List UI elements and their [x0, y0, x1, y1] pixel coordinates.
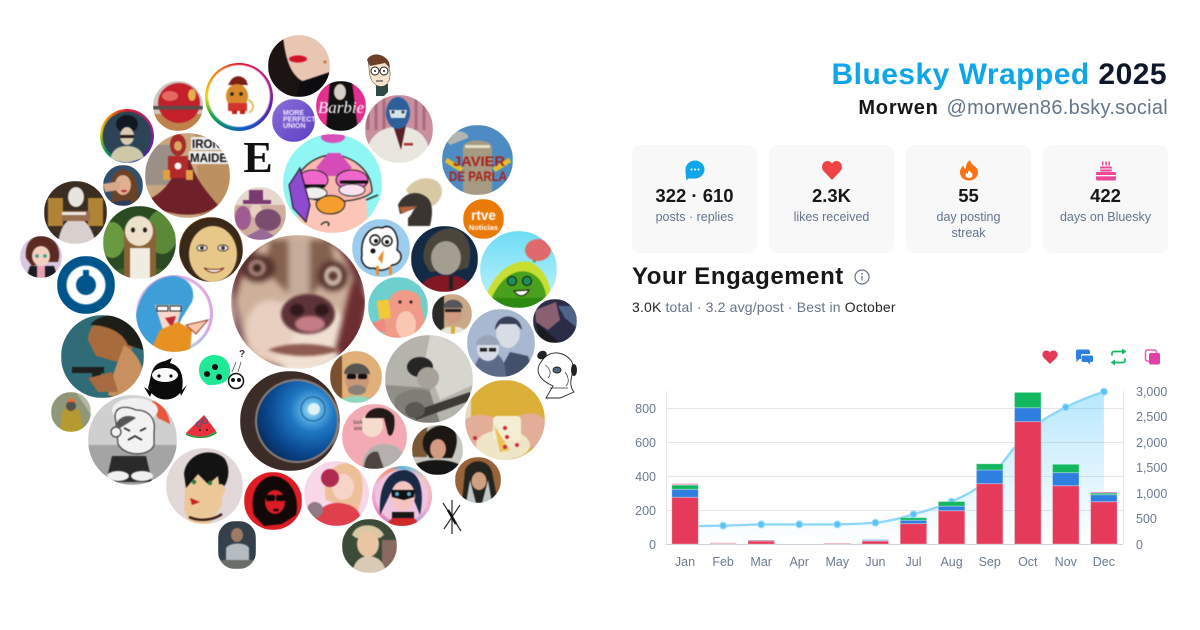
icon: birthday cake [1093, 158, 1119, 182]
avatar: curly anime girl [20, 236, 62, 278]
avatar: purple hat portrait [234, 187, 286, 240]
avatar: red lips portrait [268, 35, 330, 97]
month labels: Sep [979, 555, 1001, 569]
month labels: Jun [865, 555, 886, 569]
avatar: couple sketch [467, 309, 535, 377]
caption: streak [951, 226, 986, 240]
avatar: rtve Noticias: Noticias [469, 223, 498, 232]
avatar: woman with pistol painting [61, 315, 144, 398]
right axis labels: 3,000 [1136, 385, 1167, 399]
icon: heart [819, 158, 845, 182]
right axis labels: 0 [1136, 538, 1143, 552]
stacked bars [672, 392, 1117, 544]
avatar: rainbow ring portrait [100, 109, 154, 163]
avatar: dark purple collage [533, 299, 577, 343]
avatar: green mound character [480, 231, 557, 308]
left axis labels: 0 [649, 538, 656, 552]
avatar: masked heroine with pastel ring [372, 466, 432, 526]
avatar: hooded man [455, 457, 501, 503]
avatar: E logo: E [243, 133, 273, 182]
avatar: blue ring logo [57, 256, 115, 314]
avatar: pink sci-fi woman [304, 461, 369, 526]
left axis labels: 200 [635, 504, 656, 518]
left axis labels [635, 402, 656, 552]
avatar: otter with phone [368, 277, 428, 338]
right axis labels: 500 [1136, 512, 1157, 526]
cumulative area [685, 392, 1104, 544]
caption: posts · replies [656, 210, 733, 224]
avatar: pink background sketch girl [342, 404, 407, 469]
avatar: More Perfect Union logo: UNION [283, 123, 306, 130]
title: Bluesky Wrapped 2025 [832, 58, 1167, 91]
stat card: days on Bluesky [1043, 145, 1168, 253]
avatar: dark-haired woman [412, 425, 463, 475]
avatar: red apple [153, 81, 203, 131]
avatar: Iron Maiden costume: IRON [192, 139, 221, 151]
avatar: More Perfect Union logo: PERFECT [283, 116, 315, 124]
value: 55 [958, 185, 979, 206]
avatar: watermelon [184, 413, 218, 438]
month labels: Jan [675, 555, 695, 569]
avatar: man in sunglasses [330, 351, 382, 403]
avatar: green skull with bug [199, 348, 245, 389]
avatar: red woman silhouette [244, 472, 302, 530]
avatar: woman selfie [103, 165, 143, 206]
month labels [675, 555, 1115, 569]
month labels: Dec [1093, 555, 1115, 569]
avatar: grumpy santa sketch [88, 395, 177, 485]
cumulative line with points [685, 388, 1107, 529]
avatar: rtve Noticias: rtve [471, 208, 496, 223]
avatar: ninja [143, 358, 188, 402]
caption: days on Bluesky [1060, 210, 1151, 224]
stat card: day posting streak [906, 145, 1031, 253]
user name and handle: Morwen @morwen86.bsky.social [858, 97, 1168, 119]
heading: Your Engagement: Your Engagement [632, 263, 844, 290]
value: 422 [1090, 185, 1121, 206]
caption: likes received [794, 210, 869, 224]
chart: monthly engagement stacked bars with cumulative line [620, 380, 1180, 580]
icon: flame [956, 158, 982, 182]
left axis labels: 600 [635, 436, 656, 450]
avatar: guitar player [385, 335, 473, 423]
avatar: dog close-up [231, 235, 365, 369]
avatar: Javier de Parla mummy [442, 125, 513, 195]
right axis labels: 2,000 [1136, 436, 1167, 450]
avatar: black-haired cartoon girl [166, 448, 243, 524]
caption [914, 209, 1023, 241]
avatar: crossed swords emblem [442, 500, 462, 534]
legend: heart, replies, reposts, quotes [1040, 347, 1162, 367]
avatar: More Perfect Union logo: MORE [283, 110, 304, 117]
avatar: More Perfect Union logo [272, 99, 315, 142]
avatar: man at night photo [218, 521, 256, 569]
avatar: pink background sketch girl: and [354, 426, 362, 432]
avatar cluster [20, 35, 577, 573]
left axis labels: 800 [635, 402, 656, 416]
icon: info [854, 269, 870, 285]
month labels: May [825, 555, 850, 569]
avatar: dinosaur with knit hat [397, 178, 442, 227]
avatar: blue orb [240, 371, 340, 471]
avatar: caricature woman [179, 217, 243, 282]
month labels: Aug [940, 555, 963, 569]
month labels: Jul [906, 555, 921, 569]
month labels: Mar [750, 555, 772, 569]
avatar: Barbie [316, 81, 366, 131]
avatar: pink background sketch girl: look [353, 420, 363, 426]
month labels: Apr [789, 555, 809, 569]
right axis labels [1136, 385, 1167, 552]
avatar: Jane Austen portrait [342, 519, 397, 573]
stat card: likes received [769, 145, 894, 253]
avatar: white cartoon creature [352, 219, 410, 277]
avatar: man with glasses [432, 294, 472, 334]
icon: chat bubble [682, 158, 708, 182]
avatar: girl painting [411, 226, 478, 292]
month labels: Oct [1018, 555, 1038, 569]
right axis labels: 1,000 [1136, 487, 1167, 501]
avatar: luchador [365, 95, 433, 163]
right axis labels: 2,500 [1136, 410, 1167, 424]
avatar: Furby cartoon [283, 134, 382, 233]
value: 2.3K [812, 185, 851, 206]
avatar: barn owl [103, 206, 176, 279]
month labels: Feb [712, 555, 734, 569]
month labels: Nov [1055, 555, 1078, 569]
avatar: nerd cartoon [367, 54, 390, 96]
caption: day posting [937, 210, 1000, 224]
avatar: green skull with bug: ? [239, 349, 245, 360]
avatar: yellow sweater tea cup [465, 380, 545, 460]
avatar: Iron Maiden costume [145, 133, 230, 218]
left axis labels: 400 [635, 470, 656, 484]
avatar: rtve Noticias [463, 199, 504, 239]
avatar: firefighter photo [51, 392, 91, 432]
engagement summary: 3.0K total · 3.2 avg/post · Best in October [632, 299, 896, 315]
avatar: blue-haired anime with pink ring [136, 275, 213, 352]
stat card: posts and replies [632, 145, 757, 253]
avatar: Barbie: Barbie [318, 98, 365, 117]
right axis labels: 1,500 [1136, 461, 1167, 475]
avatar: Idefix dog sketch [537, 350, 577, 398]
value: 322 · 610 [655, 185, 734, 206]
avatar: stormtrooper bride [44, 181, 107, 244]
avatar: Javier de Parla mummy: JAVIER [453, 153, 505, 169]
avatar: potato head with rainbow ring [205, 63, 273, 131]
